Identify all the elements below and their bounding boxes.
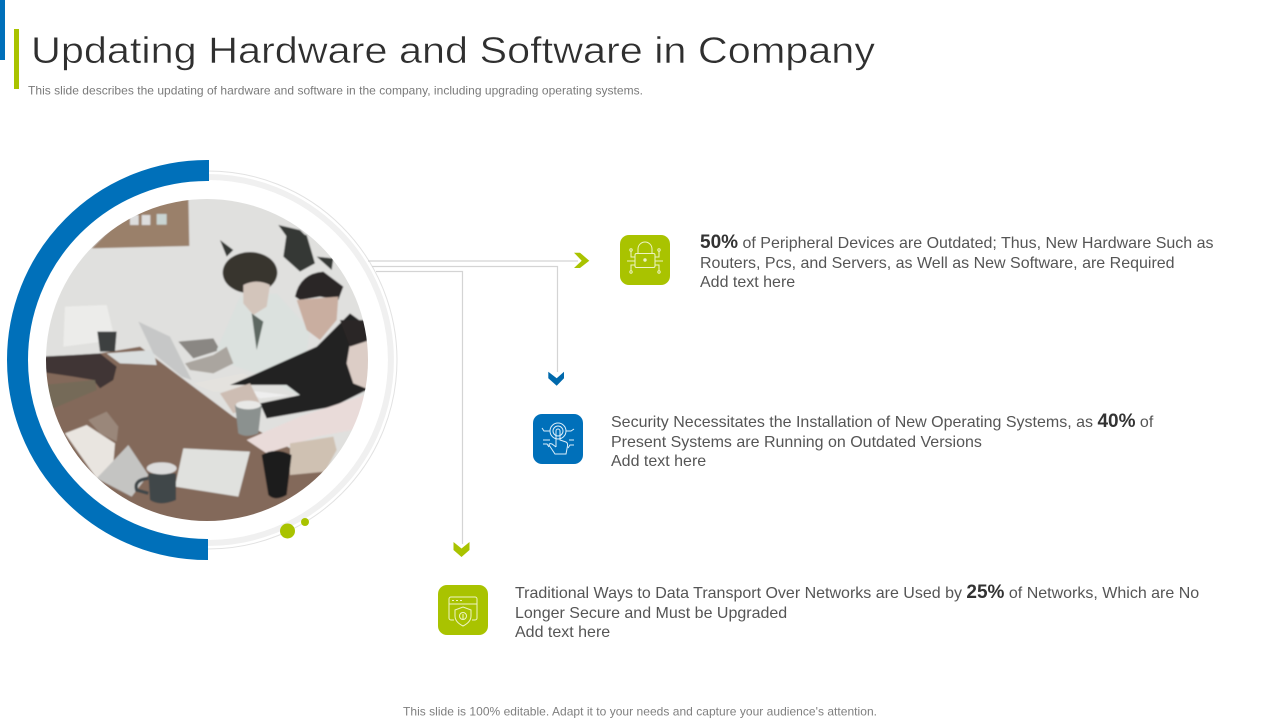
ring: light grey right half — [208, 171, 397, 549]
circular photo with rings — [7, 160, 398, 560]
text block 3: Traditional Ways to Data Transport Over Networks are Used by 25% of Networks, Which are No — [515, 582, 1199, 603]
ring: blue left half — [18, 170, 209, 550]
text block 1 — [700, 232, 1214, 291]
text block 2 — [611, 411, 1154, 470]
text block 3 — [515, 582, 1199, 641]
text block 1: Add text here — [700, 274, 795, 291]
green title accent bar — [14, 29, 19, 89]
text block 1: Routers, Pcs, and Servers, as Well as New Software, are Required — [700, 254, 1175, 272]
text block 2: Security Necessitates the Installation of New Operating Systems, as 40% of — [611, 411, 1153, 432]
arrow: blue down — [548, 372, 564, 386]
icon: touch circuit — [533, 414, 583, 464]
icon: browser shield — [438, 585, 488, 635]
arrow: green down — [454, 542, 470, 557]
arrow: green right — [574, 253, 589, 268]
text block 1: 50% of Peripheral Devices are Outdated; Thus, New Hardware Such as — [700, 232, 1214, 253]
text block 3: Longer Secure and Must be Upgraded — [515, 604, 787, 622]
text block 2: Add text here — [611, 453, 706, 470]
photo: meeting around a table — [46, 199, 368, 521]
title: Updating Hardware and Software in Company — [31, 30, 876, 71]
text block 2: Present Systems are Running on Outdated Versions — [611, 434, 982, 450]
footer note: This slide is 100% editable. Adapt it to your needs and capture your audience's attention. — [403, 704, 877, 718]
green dots — [280, 518, 309, 538]
connector lines — [368, 252, 590, 557]
subtitle: This slide describes the updating of hardware and software in the company, including upgrading operating systems. — [28, 84, 643, 98]
top blue accent bar — [0, 0, 5, 60]
text block 3: Add text here — [515, 624, 610, 641]
icon: circuit lock — [620, 235, 670, 285]
